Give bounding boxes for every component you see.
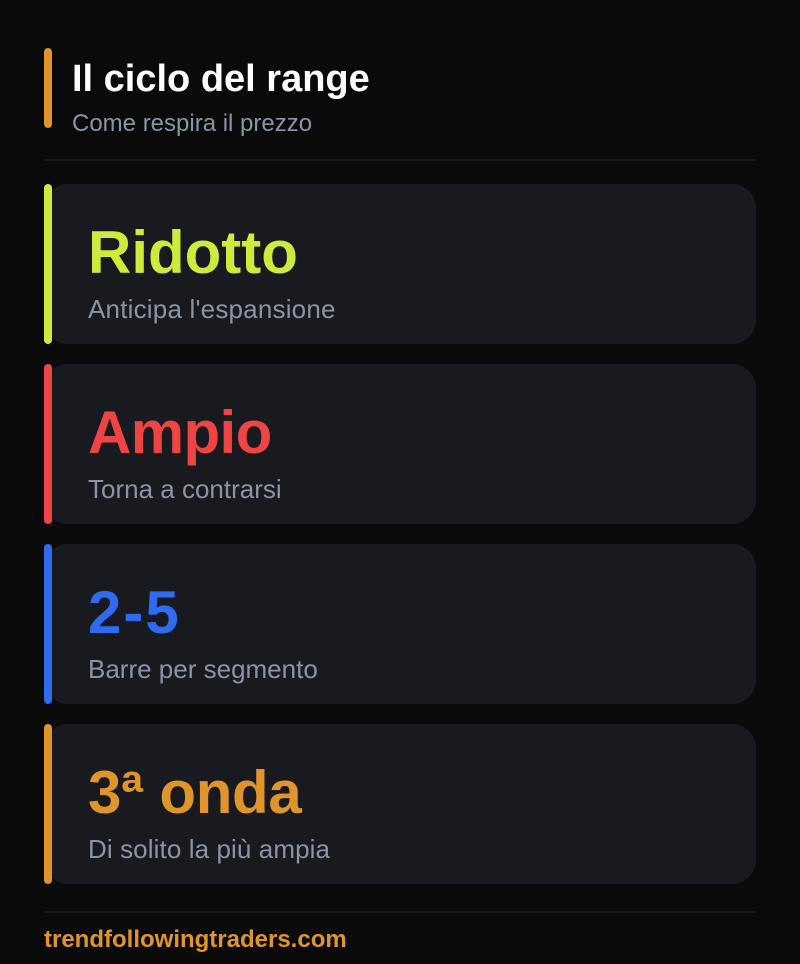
- footer url: trendfollowingtraders.com: [44, 926, 347, 953]
- value: Ridotto: Ridotto: [88, 219, 298, 286]
- accent bar: orange: [44, 724, 52, 884]
- panel: 3a onda: [44, 724, 756, 884]
- header: [44, 48, 370, 137]
- description: Torna a contrarsi: Torna a contrarsi: [88, 474, 282, 504]
- accent bar: red: [44, 364, 52, 524]
- accent bar: blue: [44, 544, 52, 704]
- value: 2-5: 2-5: [88, 579, 181, 646]
- accent bar: lime: [44, 184, 52, 344]
- header accent bar: [44, 48, 52, 128]
- value: Ampio: Ampio: [88, 399, 272, 466]
- description: Anticipa l'espansione: Anticipa l'espansione: [88, 294, 336, 324]
- description: Di solito la più ampia: Di solito la più ampia: [88, 834, 330, 864]
- title: Il ciclo del range: [72, 58, 370, 100]
- panel: Ridotto: [44, 184, 756, 344]
- panel: Ampio: [44, 364, 756, 524]
- value: 3ª onda: 3ª onda: [88, 759, 301, 826]
- panel: 2-5: [44, 544, 756, 704]
- description: Barre per segmento: Barre per segmento: [88, 654, 318, 684]
- subtitle: Come respira il prezzo: [72, 110, 312, 137]
